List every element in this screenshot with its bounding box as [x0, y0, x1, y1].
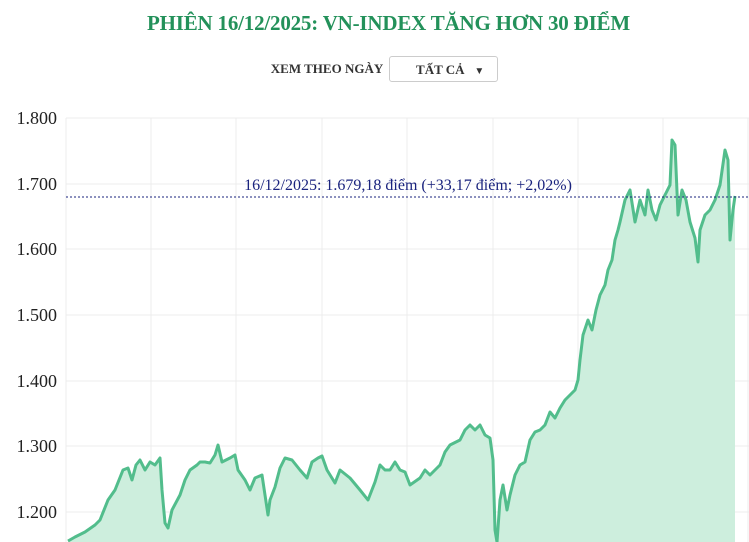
y-axis labels: 1.500 — [16, 305, 57, 325]
reference line annotation: 16/12/2025: 1.679,18 điểm (+33,17 điểm; +2,02%) — [244, 177, 572, 194]
y-axis labels: 1.800 — [16, 108, 57, 128]
y-axis labels — [16, 108, 57, 522]
y-axis labels: 1.600 — [16, 239, 57, 259]
title: PHIÊN 16/12/2025: VN-INDEX TĂNG HƠN 30 ĐIỂM — [147, 11, 630, 35]
date selector: XEM THEO NGÀY — [271, 61, 383, 76]
y-axis labels: 1.300 — [16, 436, 57, 456]
date selector — [271, 56, 498, 82]
area and line — [68, 140, 735, 542]
date selector: TẤT CẢ ▼ — [416, 62, 484, 77]
y-axis labels: 1.700 — [16, 174, 57, 194]
y-axis labels: 1.400 — [16, 371, 57, 391]
y-axis labels: 1.200 — [16, 502, 57, 522]
